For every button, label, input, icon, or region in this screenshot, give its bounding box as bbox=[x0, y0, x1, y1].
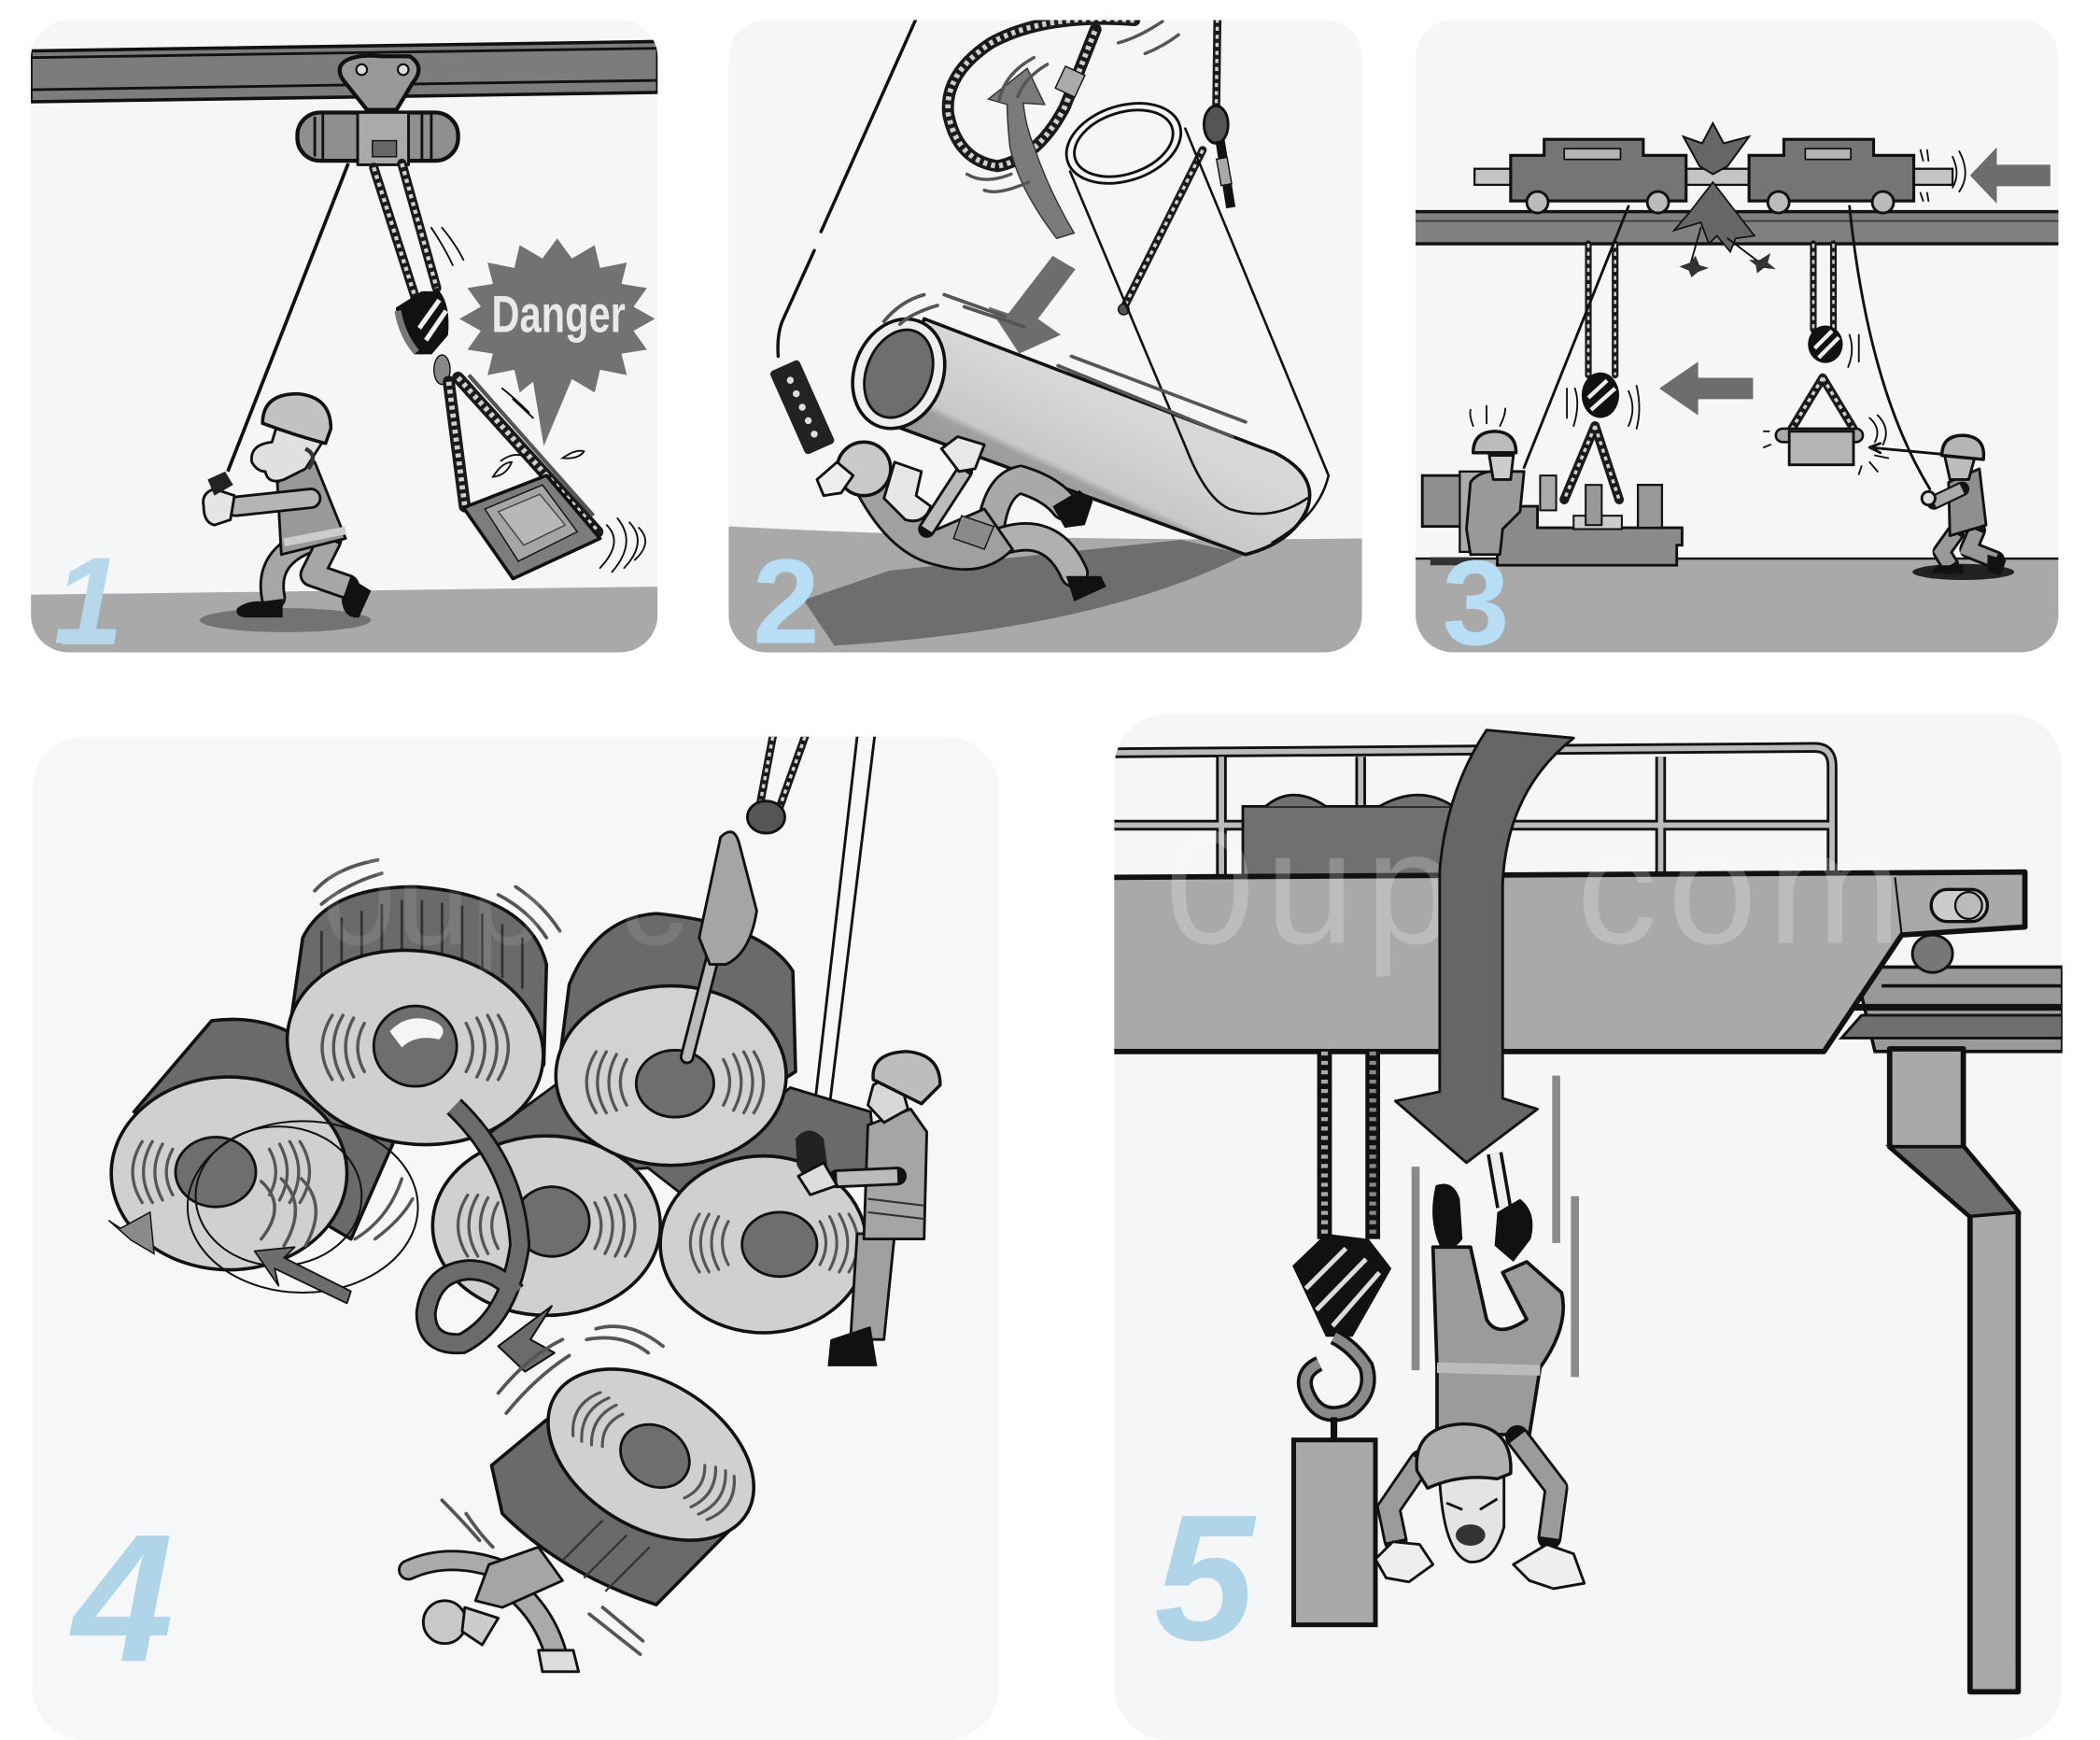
hoist chains bbox=[373, 163, 437, 297]
down arrow bbox=[989, 256, 1076, 354]
coil motion lines bbox=[315, 860, 560, 938]
ring sling bbox=[1064, 102, 1182, 185]
suspended load bbox=[1776, 429, 1863, 465]
left trolley bbox=[1511, 139, 1686, 213]
left chains bbox=[1588, 244, 1615, 375]
right pendant bbox=[1850, 206, 1930, 488]
danger burst callout bbox=[459, 238, 655, 446]
looping chain bbox=[948, 19, 1135, 166]
girder bbox=[1105, 872, 2025, 1052]
hook block bbox=[1292, 1234, 1391, 1337]
pendant control box bbox=[769, 359, 836, 456]
right-hand push arrow bbox=[1970, 148, 2051, 204]
falling arrow bbox=[1396, 730, 1573, 1163]
panel 3: trolley collision bbox=[1406, 21, 2069, 671]
number 3: 3 bbox=[1443, 536, 1509, 671]
crushed worker bbox=[409, 1547, 579, 1672]
coil: left bbox=[111, 1019, 418, 1293]
shaft bbox=[1474, 169, 1952, 185]
pipe shadow bbox=[804, 540, 1246, 645]
machine operator bbox=[1431, 406, 1524, 565]
sling lines around pipe bbox=[1070, 129, 1329, 543]
panel 5: worker falling from crane girder bbox=[1105, 714, 2063, 1740]
pipe motion lines bbox=[884, 295, 1246, 437]
pendant stick bbox=[1495, 1153, 1504, 1207]
motion lines near chain bbox=[967, 21, 1178, 191]
curved up arrow bbox=[989, 68, 1074, 238]
trolley drums bbox=[1243, 795, 1462, 877]
ticks around hooks bbox=[1567, 335, 1859, 429]
left tag and arrow bbox=[108, 1212, 351, 1303]
coil: right bbox=[660, 1156, 867, 1333]
warning arrow line bbox=[1869, 444, 1940, 454]
panel 1: swinging load warning bbox=[31, 21, 657, 669]
panel 2: falling pipe bbox=[728, 19, 1362, 669]
motion ticks bbox=[1921, 150, 1966, 201]
coil: top right bbox=[556, 913, 796, 1166]
faint watermark on girder: 0up. com bbox=[1165, 799, 1902, 978]
lifting clamp bbox=[687, 832, 756, 1057]
pendant control cable bbox=[228, 163, 348, 472]
crate motion lines bbox=[431, 228, 645, 572]
right trolley bbox=[1749, 139, 1914, 213]
impact droplets bbox=[493, 451, 584, 477]
railing bbox=[1114, 747, 1832, 877]
number 1: 1 bbox=[53, 531, 122, 669]
right sling bbox=[1792, 377, 1853, 429]
danger burst callout: Danger bbox=[491, 285, 626, 344]
coil: top bbox=[275, 886, 556, 1161]
right chains bbox=[1813, 244, 1833, 330]
pendant cable bbox=[778, 19, 916, 356]
machine bbox=[1422, 472, 1682, 565]
collision burst bbox=[1674, 123, 1776, 277]
overhead beam bbox=[31, 41, 657, 102]
dark backing bbox=[482, 1083, 877, 1206]
upside-down worker bbox=[1375, 1183, 1585, 1589]
worker pulling pendant bbox=[200, 394, 371, 632]
tilted crate bbox=[463, 475, 600, 579]
hoist trolley bbox=[297, 56, 458, 164]
floor bbox=[1416, 559, 2058, 652]
pendant double line bbox=[811, 737, 875, 1132]
right chains bbox=[1119, 19, 1232, 315]
crane wheel bbox=[1912, 935, 1952, 972]
centre arrow bbox=[1659, 361, 1753, 416]
hook bbox=[1304, 1337, 1368, 1414]
ticks around load bbox=[1764, 416, 1888, 474]
falling worker bbox=[817, 437, 1106, 601]
floor bbox=[31, 587, 657, 652]
number 1 bbox=[56, 559, 117, 644]
hoist chains bbox=[747, 737, 805, 833]
pipe bbox=[837, 305, 1310, 555]
floor bbox=[728, 527, 1362, 652]
left hook block bbox=[1582, 373, 1619, 417]
standing worker bbox=[796, 1052, 940, 1366]
slings holding crate bbox=[449, 375, 598, 531]
left pendant bbox=[1524, 206, 1628, 468]
right hook block bbox=[1808, 326, 1843, 363]
number 4: 4 bbox=[69, 1496, 174, 1700]
panel 4: collapsing coil stack bbox=[33, 737, 999, 1740]
falling coil bbox=[491, 1334, 784, 1605]
snake arrow bbox=[426, 1107, 555, 1372]
wire ropes bbox=[1325, 1052, 1373, 1239]
coil: middle bbox=[432, 1136, 660, 1315]
railing highlights bbox=[1114, 747, 1832, 877]
hook inner bbox=[1304, 1337, 1368, 1414]
number 5: 5 bbox=[1154, 1477, 1257, 1677]
hanging block bbox=[1294, 1417, 1375, 1625]
hook block bbox=[397, 292, 450, 385]
track rail at right bbox=[1841, 967, 2063, 1052]
number 2: 2 bbox=[753, 534, 820, 669]
left sling bbox=[1564, 426, 1619, 500]
runway beam bbox=[1406, 212, 2069, 244]
right worker bbox=[1912, 435, 2014, 580]
support column bbox=[1890, 1049, 2018, 1691]
motion bars bbox=[1416, 1076, 1575, 1377]
falling coil motion lines bbox=[442, 1326, 663, 1654]
faint watermark: 0up. c bbox=[321, 824, 686, 973]
